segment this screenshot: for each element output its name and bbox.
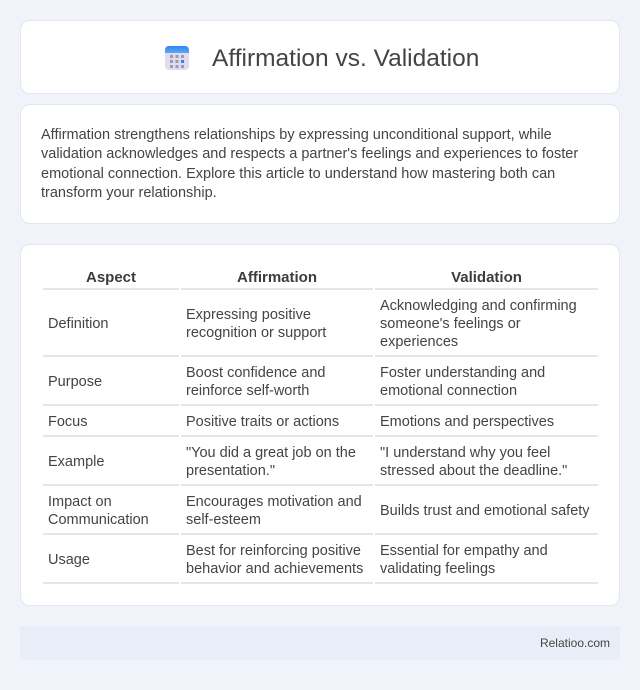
row: purpose: Purpose bbox=[48, 374, 102, 390]
footer bar bbox=[20, 626, 620, 660]
row: example: presentation." bbox=[186, 463, 275, 479]
panel: title bbox=[20, 20, 620, 94]
row: definition: someone's feelings or bbox=[380, 316, 521, 332]
row: example: "You did a great job on the bbox=[186, 445, 356, 461]
row: definition: recognition or support bbox=[186, 325, 326, 341]
row: usage: behavior and achievements bbox=[186, 561, 363, 577]
intro text: Affirmation strengthens relationships by expressing unconditional support, while bbox=[41, 127, 552, 143]
intro text bbox=[41, 127, 578, 201]
row: purpose: emotional connection bbox=[380, 383, 517, 399]
row: example: stressed about the deadline." bbox=[380, 463, 567, 479]
row: usage: Essential for empathy and bbox=[380, 543, 548, 559]
row: example bbox=[48, 445, 567, 479]
intro text: validation acknowledges and respects a partner's feelings and experiences to foster bbox=[41, 146, 578, 162]
row: definition bbox=[48, 298, 577, 350]
intro text: transform your relationship. bbox=[41, 185, 217, 201]
row: usage: Best for reinforcing positive bbox=[186, 543, 361, 559]
row: definition: Expressing positive bbox=[186, 307, 311, 323]
row: purpose: Foster understanding and bbox=[380, 365, 545, 381]
row: focus: Emotions and perspectives bbox=[380, 414, 554, 430]
row: purpose: reinforce self-worth bbox=[186, 383, 309, 399]
row: impact on communication: Impact on bbox=[48, 494, 112, 510]
row: impact on communication: Encourages motivation and bbox=[186, 494, 362, 510]
row: focus: Focus bbox=[48, 414, 88, 430]
table header: Affirmation bbox=[237, 269, 317, 286]
table header: Aspect bbox=[86, 269, 136, 286]
icon: calendar bbox=[165, 46, 189, 70]
intro text: emotional connection. Explore this article to understand how mastering both can bbox=[41, 166, 555, 182]
row: definition: Definition bbox=[48, 316, 108, 332]
footer text: Relatioo.com bbox=[540, 636, 610, 650]
row: focus: Positive traits or actions bbox=[186, 414, 339, 430]
row: purpose bbox=[48, 365, 545, 399]
panel: comparison table bbox=[20, 244, 620, 606]
row: example: "I understand why you feel bbox=[380, 445, 550, 461]
panel: introduction bbox=[20, 104, 620, 224]
row: impact on communication: self-esteem bbox=[186, 512, 261, 528]
row: definition: Acknowledging and confirming bbox=[380, 298, 577, 314]
table header: Validation bbox=[451, 269, 522, 286]
row: purpose: Boost confidence and bbox=[186, 365, 325, 381]
title text: Affirmation vs. Validation bbox=[212, 45, 479, 72]
row: impact on communication: Communication bbox=[48, 512, 149, 528]
row: focus bbox=[48, 414, 554, 430]
row: usage: validating feelings bbox=[380, 561, 495, 577]
row: example: Example bbox=[48, 454, 104, 470]
row: definition: experiences bbox=[380, 334, 458, 350]
row: usage: Usage bbox=[48, 552, 90, 568]
row: impact on communication bbox=[48, 494, 590, 528]
row: impact on communication: Builds trust and emotional safety bbox=[380, 503, 590, 519]
row: usage bbox=[48, 543, 548, 577]
table header bbox=[86, 269, 522, 286]
